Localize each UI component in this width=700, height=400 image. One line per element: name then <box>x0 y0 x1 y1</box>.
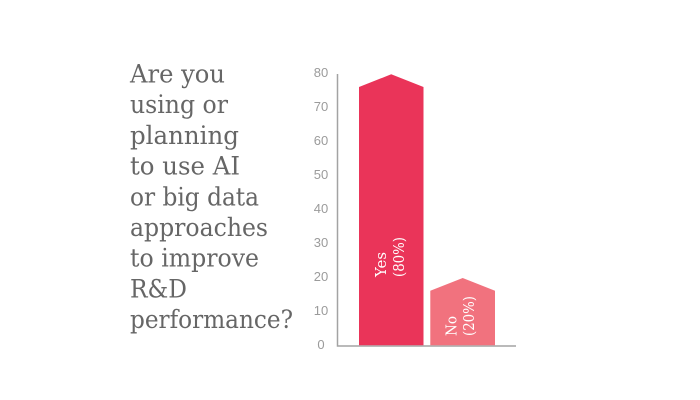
question heading: Are you <box>129 60 225 88</box>
bar: No 20%: (20%) <box>460 296 478 336</box>
y axis labels: 40 <box>314 201 328 216</box>
question heading: to improve <box>130 244 259 273</box>
bar: No 20% <box>430 278 495 345</box>
y axis labels: 50 <box>314 167 328 182</box>
question heading: performance? <box>130 305 293 334</box>
y axis labels: 80 <box>314 65 328 80</box>
question heading: R&D <box>130 274 187 303</box>
question heading <box>129 60 293 334</box>
axes <box>338 74 516 346</box>
y axis labels: 30 <box>314 235 328 250</box>
question heading: approaches <box>130 213 268 242</box>
question heading: or big data <box>130 182 259 211</box>
y axis labels: 60 <box>314 133 328 148</box>
bar: Yes 80% <box>359 74 424 345</box>
y axis labels: 70 <box>314 99 328 114</box>
y axis labels: 20 <box>314 269 328 284</box>
question heading: to use AI <box>130 152 240 181</box>
bar: Yes 80%: (80%) <box>390 237 408 277</box>
bar: No 20%: No <box>442 316 460 336</box>
bar chart <box>314 65 516 352</box>
y axis labels <box>314 65 328 352</box>
y axis labels: 10 <box>314 303 328 318</box>
question heading: planning <box>130 121 239 150</box>
question heading: using or <box>130 90 228 119</box>
bar: Yes 80%: Yes <box>372 252 390 278</box>
y axis labels: 0 <box>317 337 325 352</box>
